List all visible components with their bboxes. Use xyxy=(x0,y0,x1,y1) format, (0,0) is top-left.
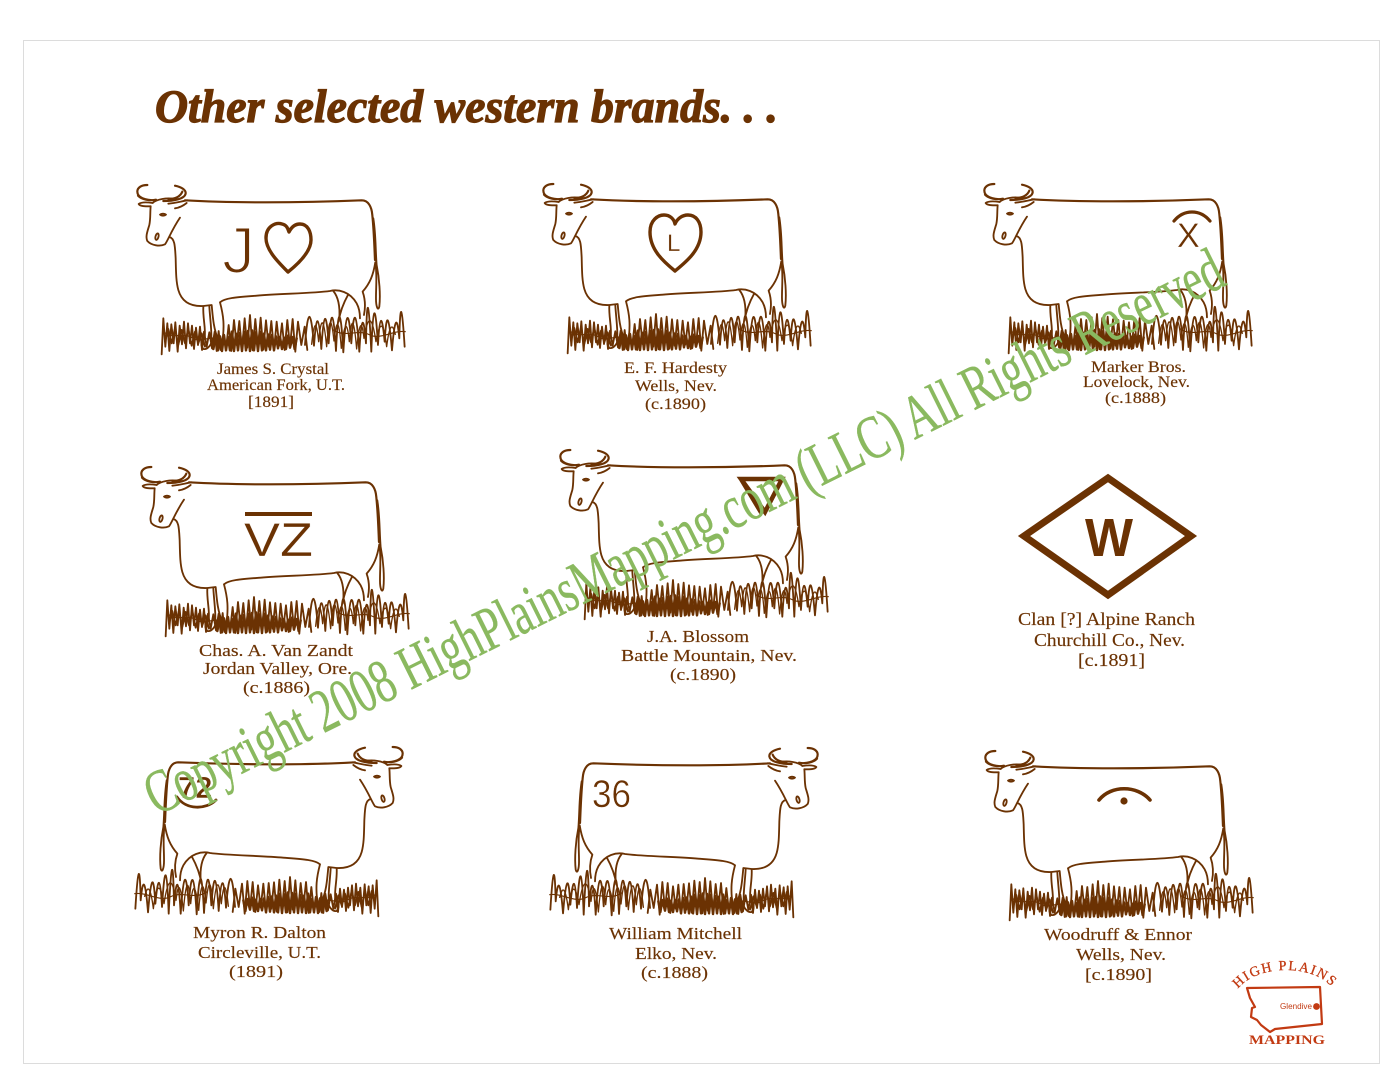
Glendive label: Glendive xyxy=(1280,1001,1312,1011)
panel: E. F. Hardesty brand xyxy=(543,184,811,413)
map of Montana xyxy=(1247,987,1322,1032)
brand: 36: 36 xyxy=(592,773,631,816)
caption: Marker Bros. xyxy=(1091,359,1186,376)
caption: J.A. Blossom xyxy=(647,627,749,646)
caption: Woodruff & Ennor xyxy=(1044,925,1192,944)
caption: Jordan Valley, Ore. xyxy=(203,659,352,678)
caption: (c.1886) xyxy=(243,678,310,697)
caption: Myron R. Dalton xyxy=(193,923,327,942)
caption: [c.1891] xyxy=(1078,650,1145,670)
caption: Lovelock, Nev. xyxy=(1083,374,1190,391)
caption: James S. Crystal xyxy=(217,361,329,378)
caption: (1891) xyxy=(229,962,283,981)
caption xyxy=(624,360,727,413)
caption xyxy=(207,361,345,411)
panel: James S. Crystal brand xyxy=(137,185,405,411)
caption: E. F. Hardesty xyxy=(624,360,727,377)
brand: 72 with arc: 72 xyxy=(178,770,212,805)
MAPPING label: MAPPING xyxy=(1249,1033,1325,1047)
panel: William Mitchell brand xyxy=(550,748,818,982)
caption: (c.1890) xyxy=(645,396,706,413)
panel: Marker Bros. brand xyxy=(984,184,1252,407)
caption: Battle Mountain, Nev. xyxy=(621,646,797,665)
brand: diamond W xyxy=(1024,478,1191,595)
panel: Woodruff & Ennor brand xyxy=(985,751,1253,984)
caption: Wells, Nev. xyxy=(1076,945,1166,964)
caption: (c.1890) xyxy=(670,665,736,684)
panel: Clan Alpine Ranch brand xyxy=(1018,478,1195,670)
caption: Circleville, U.T. xyxy=(198,943,321,962)
caption: [1891] xyxy=(248,394,294,411)
caption: Wells, Nev. xyxy=(635,378,717,395)
brand: arc over X: X xyxy=(1177,217,1200,255)
brand: bar VZ: VZ xyxy=(244,513,313,566)
caption: Churchill Co., Nev. xyxy=(1034,630,1185,650)
logo: High Plains Mapping xyxy=(1232,960,1336,1047)
caption xyxy=(609,924,742,982)
caption xyxy=(1044,925,1192,984)
brand: heart L xyxy=(650,215,701,271)
caption: (c.1888) xyxy=(641,963,708,982)
panel: Chas. A. Van Zandt brand xyxy=(141,467,409,697)
brand: diamond W: W xyxy=(1085,508,1133,568)
logo arc text: HIGH PLAINS xyxy=(1232,960,1336,988)
brand: arc over X xyxy=(1174,212,1210,255)
caption: (c.1888) xyxy=(1105,390,1166,407)
caption xyxy=(1083,359,1190,407)
panel: J.A. Blossom brand xyxy=(560,450,828,684)
caption xyxy=(1018,609,1195,670)
caption: Elko, Nev. xyxy=(635,944,717,963)
caption: American Fork, U.T. xyxy=(207,377,345,394)
caption: Chas. A. Van Zandt xyxy=(199,641,353,660)
caption xyxy=(199,641,353,697)
caption: Clan [?] Alpine Ranch xyxy=(1018,609,1195,629)
caption: [c.1890] xyxy=(1085,965,1152,984)
Glendive marker xyxy=(1313,1003,1320,1010)
caption: William Mitchell xyxy=(609,924,742,943)
title: Other selected western brands. . . xyxy=(155,81,778,133)
brand: arc and dot xyxy=(1099,789,1150,805)
caption xyxy=(193,923,327,981)
brand: J heart: J xyxy=(222,213,255,287)
caption xyxy=(621,627,797,684)
brand: heart L: L xyxy=(667,230,680,257)
panel: Myron R. Dalton brand xyxy=(135,747,403,981)
brand: triangle xyxy=(741,479,782,514)
brand: J heart xyxy=(222,213,311,287)
